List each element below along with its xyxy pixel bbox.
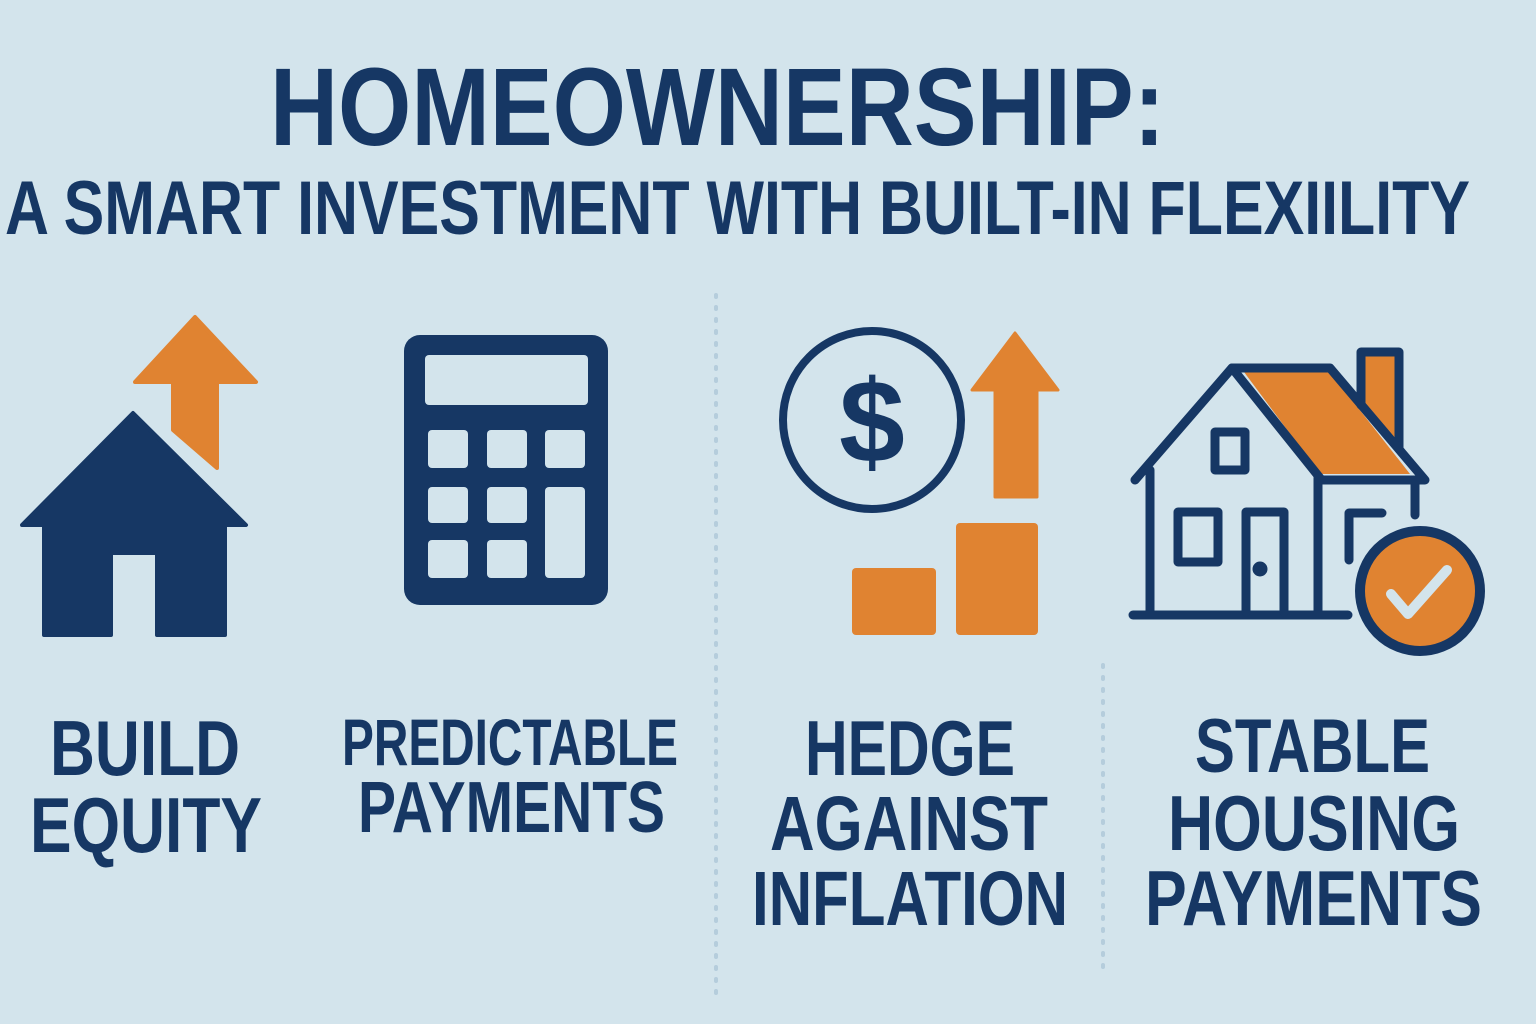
icon: dollar with rising bars xyxy=(783,331,1058,635)
label: stable housing payments: STABLE xyxy=(1195,704,1430,789)
label: build equity xyxy=(30,704,262,869)
icon: house with check xyxy=(1133,352,1480,651)
label: build equity: BUILD xyxy=(50,704,240,792)
label: predictable payments: PAYMENTS xyxy=(358,768,665,848)
label: build equity: EQUITY xyxy=(30,781,262,869)
icon: house with up arrow xyxy=(22,317,256,635)
label: hedge against inflation: INFLATION xyxy=(752,856,1068,942)
icon: dollar with rising bars: $ xyxy=(839,356,905,488)
label: predictable payments: PREDICTABLE xyxy=(342,705,678,779)
icon: calculator xyxy=(404,335,608,605)
title: HOMEOWNERSHIP: xyxy=(270,46,1165,169)
label: hedge against inflation: AGAINST xyxy=(770,781,1048,867)
label: stable housing payments xyxy=(1145,704,1482,942)
label: predictable payments xyxy=(342,705,678,848)
label: hedge against inflation xyxy=(752,704,1068,942)
label: stable housing payments: HOUSING xyxy=(1168,779,1460,867)
label: hedge against inflation: HEDGE xyxy=(805,704,1015,792)
